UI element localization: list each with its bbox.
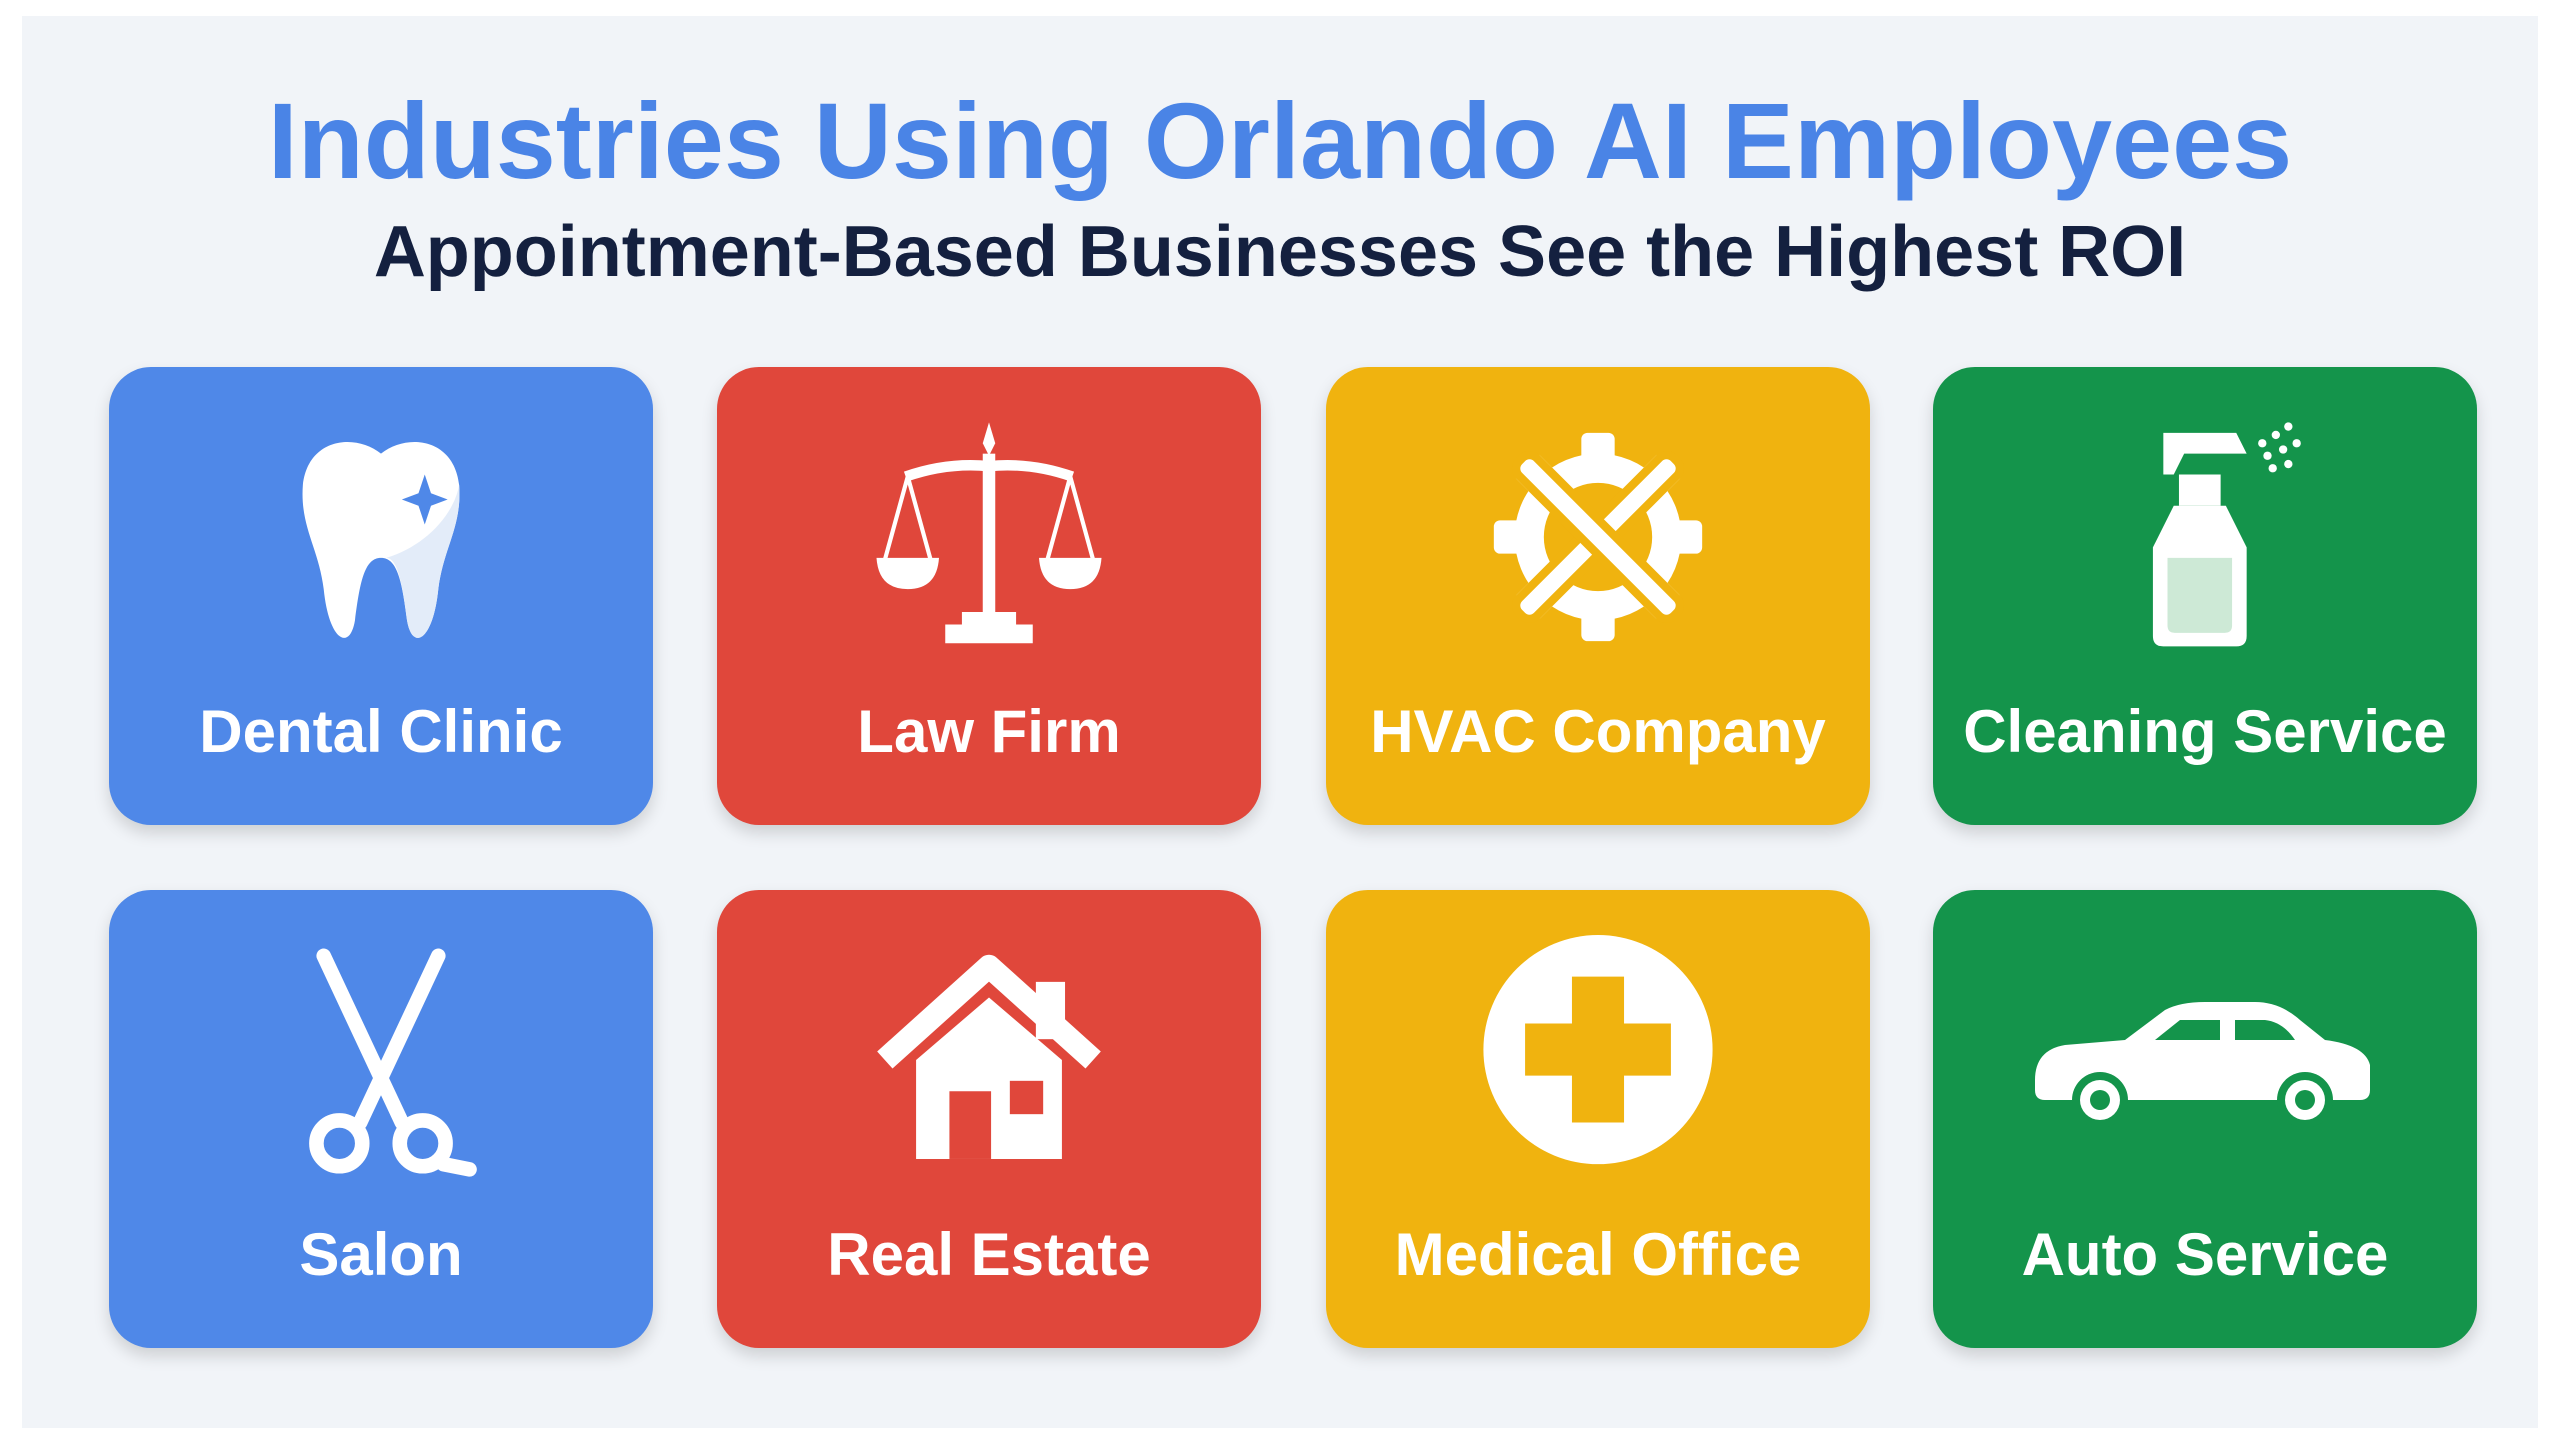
icon: tooth	[302, 442, 460, 638]
subtitle: Appointment-Based Businesses See the Highest ROI	[374, 212, 2186, 292]
icon: medical cross	[1483, 935, 1713, 1164]
panel: real estate	[717, 890, 1261, 1348]
label: Dental Clinic	[199, 698, 563, 765]
panel: salon	[109, 890, 653, 1348]
label: Cleaning Service	[1963, 698, 2447, 765]
label: Law Firm	[857, 698, 1121, 765]
label: Real Estate	[827, 1221, 1151, 1288]
label: Salon	[299, 1221, 463, 1288]
title: Industries Using Orlando AI Employees	[268, 80, 2292, 201]
label: HVAC Company	[1370, 698, 1826, 765]
panel: hvac	[1326, 367, 1870, 825]
label: Auto Service	[2022, 1221, 2388, 1288]
panel: dental clinic	[109, 367, 653, 825]
icon: spray bottle	[2152, 422, 2301, 646]
panel: medical office	[1326, 890, 1870, 1348]
panel: cleaning	[1933, 367, 2477, 825]
icon: house	[877, 954, 1101, 1159]
panel: auto service	[1933, 890, 2477, 1348]
label: Medical Office	[1395, 1221, 1801, 1288]
icon: car	[2035, 1002, 2370, 1120]
icon: scales	[876, 422, 1102, 644]
panel: law firm	[717, 367, 1261, 825]
icon: scissors	[309, 948, 477, 1177]
icon: gear with tools	[1494, 432, 1702, 642]
